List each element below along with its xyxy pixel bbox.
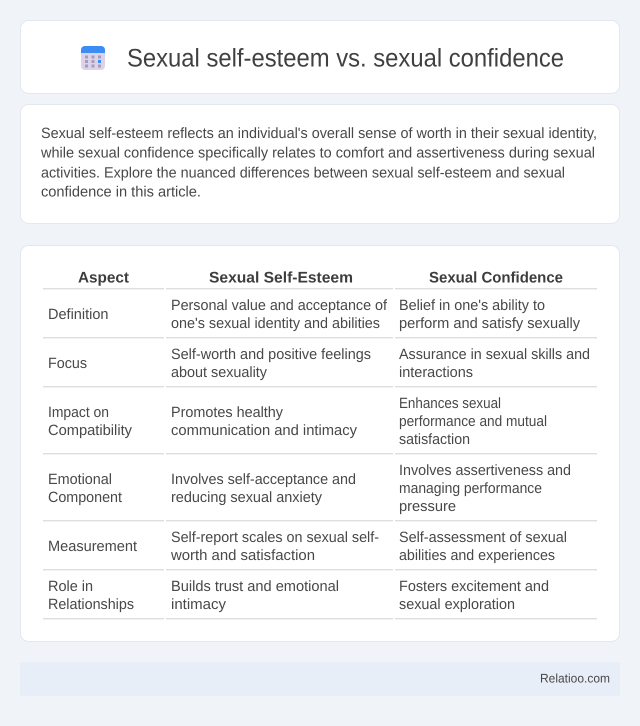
panel: title card <box>20 20 620 94</box>
row: impact on compatibility: Compatibility <box>48 423 133 439</box>
row: measurement <box>43 530 597 570</box>
text block: intro paragraph: Sexual self-esteem reflects an individual's overall sense of worth in their sexual identity, <box>41 126 597 142</box>
row: impact on compatibility: Impact on <box>48 405 109 421</box>
row: focus: about sexuality <box>171 365 268 381</box>
row: role in relationships: sexual exploration <box>399 597 515 613</box>
row: emotional component: reducing sexual anxiety <box>171 490 323 506</box>
row: focus: Assurance in sexual skills and <box>399 347 590 363</box>
row: emotional component: Emotional <box>48 472 112 488</box>
row: measurement: Measurement <box>48 539 138 555</box>
row: role in relationships: Relationships <box>48 597 134 613</box>
row: emotional component: Involves self-acceptance and <box>171 472 356 488</box>
row: focus: Self-worth and positive feelings <box>171 347 371 363</box>
row: role in relationships: Fosters excitement and <box>399 579 549 595</box>
row: measurement: abilities and experiences <box>399 548 555 564</box>
row: impact on compatibility: Promotes healthy <box>171 405 284 421</box>
row: emotional component: pressure <box>399 499 456 515</box>
table header <box>43 270 597 289</box>
row: role in relationships: Builds trust and emotional <box>171 579 339 595</box>
row: focus: interactions <box>399 365 473 381</box>
row: definition <box>43 298 597 338</box>
panel: introduction <box>20 104 620 224</box>
table header: Aspect <box>78 270 129 287</box>
row: measurement: Self-assessment of sexual <box>399 530 567 546</box>
text block: intro paragraph: while sexual confidence specifically relates to comfort and assertiveness during sexual <box>40 146 595 162</box>
row: emotional component <box>43 463 597 521</box>
row: measurement: worth and satisfaction <box>170 548 315 564</box>
row: emotional component: Component <box>48 490 123 506</box>
footer: Relatioo.com <box>540 672 610 686</box>
row: role in relationships <box>43 579 597 619</box>
row: definition: perform and satisfy sexually <box>399 316 581 332</box>
row: role in relationships: Role in <box>48 579 93 595</box>
row: impact on compatibility: Enhances sexual <box>399 396 501 412</box>
row: definition: Belief in one's ability to <box>399 298 545 314</box>
table header: Sexual Self-Esteem <box>209 270 353 287</box>
row: impact on compatibility: performance and mutual <box>399 414 547 430</box>
icon: calendar <box>81 46 105 70</box>
row: impact on compatibility: satisfaction <box>399 432 470 448</box>
row: focus: Focus <box>48 356 87 372</box>
row: impact on compatibility: communication and intimacy <box>171 423 358 439</box>
row: definition: Definition <box>48 307 108 323</box>
row: emotional component: managing performance <box>399 481 542 497</box>
row: focus <box>43 347 597 387</box>
table header: Sexual Confidence <box>429 270 563 287</box>
row: measurement: Self-report scales on sexual self- <box>171 530 379 546</box>
row: emotional component: Involves assertiveness and <box>399 463 571 479</box>
row: role in relationships: intimacy <box>171 597 227 613</box>
row: definition: Personal value and acceptance of <box>171 298 388 314</box>
footer <box>20 662 620 696</box>
panel: comparison table <box>20 246 620 642</box>
row: impact on compatibility <box>43 396 597 454</box>
title: Sexual self-esteem vs. sexual confidence <box>127 45 564 73</box>
text block: intro paragraph <box>40 126 597 201</box>
text block: intro paragraph: confidence in this article. <box>41 185 201 201</box>
text block: intro paragraph: activities. Explore the nuanced differences between sexual self-esteem and sexual <box>41 165 565 181</box>
row: definition: one's sexual identity and abilities <box>171 316 380 332</box>
